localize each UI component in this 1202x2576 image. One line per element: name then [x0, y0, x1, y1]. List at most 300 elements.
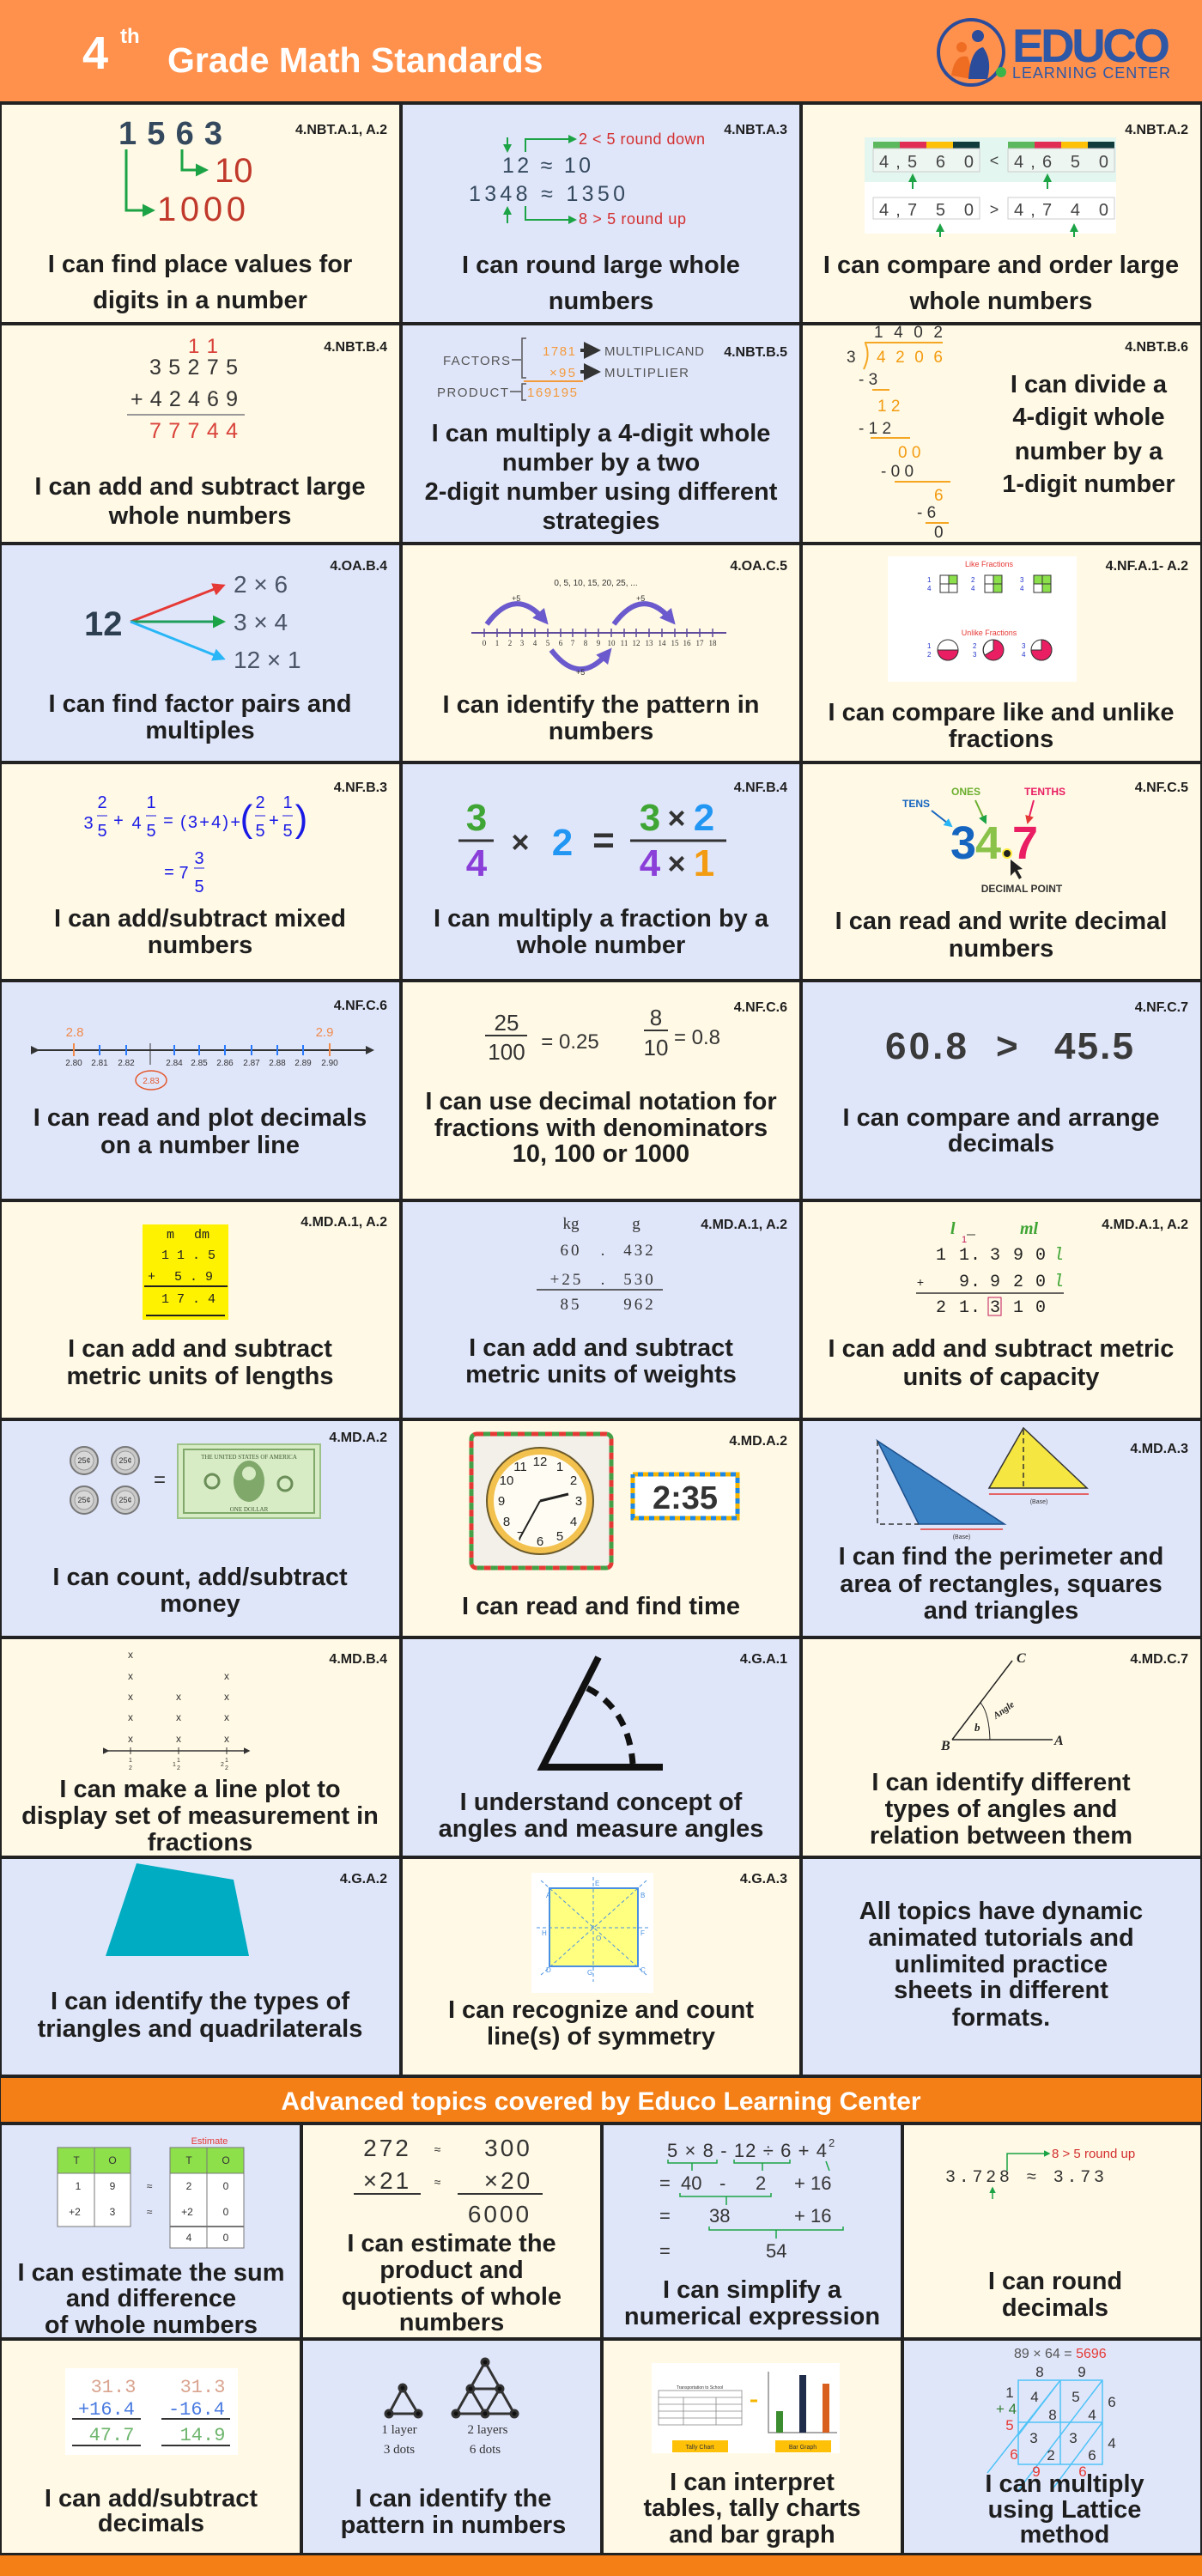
panel: multiply: number by a two: [502, 449, 700, 477]
panel: number pattern: 4: [533, 639, 537, 647]
panel: line plot: [0, 1637, 401, 1857]
panel: metric capacity: 0: [1035, 1298, 1046, 1318]
panel: estimate product: ×20: [484, 2167, 532, 2194]
panel: all topics note: unlimited practice: [895, 1951, 1108, 1978]
panel: decimals number line: 2.81: [91, 1059, 108, 1068]
panel: simplify expression: 54: [766, 2240, 786, 2262]
panel: perimeter area: (Base): [953, 1534, 970, 1540]
panel: dot pattern: 1 layer: [381, 2423, 417, 2437]
panel: simplify expression: + 16: [794, 2205, 831, 2227]
panel: round decimals: 8 > 5 round up: [1052, 2147, 1135, 2161]
panel: fraction times whole: ×: [667, 846, 686, 881]
panel: number pattern: 6: [559, 639, 563, 647]
panel: metric lengths: +: [148, 1270, 155, 1285]
panel: fraction times whole: 2: [694, 797, 714, 839]
panel: lattice multiplication: 9: [1032, 2464, 1041, 2480]
panel: perimeter area: 4.MD.A.3: [1130, 1442, 1188, 1456]
panel: number pattern: 7: [571, 639, 575, 647]
panel: estimate product: ≈: [434, 2175, 443, 2189]
title: [82, 25, 543, 80]
panel: rounding: 8 > 5 round up: [579, 210, 686, 228]
panel: line plot: 2: [221, 1762, 224, 1768]
compare chart: <: [990, 152, 999, 169]
panel: divide: 1 4 0 2: [874, 324, 943, 342]
panel: decimal notation: I can use decimal notation for: [425, 1088, 777, 1115]
panel: factor pairs: 4.OA.B.4: [330, 559, 387, 574]
icon: coins: [70, 1447, 166, 1514]
panel: decimal place: 7: [1012, 817, 1038, 869]
panel: factor pairs: I can find factor pairs and: [49, 690, 351, 718]
panel: fraction times whole: 4.NF.B.4: [734, 781, 787, 795]
panel: estimate sum: O: [222, 2154, 230, 2166]
icon: symmetry square: F: [640, 1929, 645, 1937]
panel: line plot: x: [176, 1691, 181, 1703]
panel: simplify expression: 38: [709, 2205, 730, 2227]
panel: lattice multiplication: 8: [1035, 2364, 1044, 2380]
panel: money: 4.MD.A.2: [329, 1431, 387, 1445]
panel: decimals number line: 2.89: [294, 1059, 312, 1068]
panel: all topics note: sheets in different: [894, 1977, 1108, 2004]
panel: types of angles: C: [1017, 1651, 1026, 1666]
panel: line plot: x: [128, 1733, 133, 1745]
panel: mixed numbers: [0, 762, 401, 981]
panel: perimeter area: and triangles: [924, 1597, 1078, 1625]
panel: compare order: [801, 103, 1202, 324]
panel: perimeter area: (Base): [1030, 1499, 1047, 1505]
panel: decimals number line: 2.83: [143, 1077, 160, 1086]
panel: add subtract decimals: 31.3: [180, 2377, 225, 2398]
panel: divide: 0 0: [898, 444, 920, 462]
compare chart: [865, 137, 1116, 237]
panel: divide: 1 2: [877, 398, 900, 416]
panel: line plot: x: [128, 1691, 133, 1703]
panel: estimate sum: and difference: [66, 2285, 236, 2312]
panel: simplify expression: -: [719, 2172, 725, 2194]
icon: symmetry square: A: [546, 1892, 551, 1899]
panel: line plot: 4.MD.B.4: [329, 1652, 387, 1667]
panel: like unlike fractions: 1: [927, 642, 932, 650]
panel: simplify expression: 2: [756, 2172, 766, 2194]
panel: number pattern: 14: [658, 639, 666, 647]
panel: estimate sum: 1: [76, 2180, 82, 2192]
panel: number pattern: 15: [671, 639, 679, 647]
panel: simplify expression: numerical expression: [624, 2303, 880, 2330]
panel: metric capacity: 1: [959, 1246, 969, 1266]
icon: symmetry square: O: [596, 1935, 601, 1942]
panel: add subtract: +42469: [131, 387, 238, 411]
panel: like unlike fractions: 3: [1022, 642, 1026, 650]
compare chart: 4,7 5 0: [879, 201, 974, 220]
panel: divide: 3: [847, 349, 856, 367]
panel: add subtract decimals: +16.4: [78, 2399, 135, 2421]
panel: round decimals: decimals: [1002, 2294, 1108, 2322]
icon: clock: 8: [503, 1515, 510, 1529]
panel: line plot: x: [128, 1649, 133, 1661]
panel: decimal notation: = 0.8: [674, 1026, 720, 1049]
panel: line plot: x: [176, 1711, 181, 1723]
panel: line plot: 1: [173, 1762, 176, 1768]
panel: estimate product: 6000: [468, 2201, 531, 2227]
panel: place values: 1000: [157, 191, 246, 228]
panel: metric capacity: 1: [962, 1235, 967, 1245]
panel: fraction times whole: 3: [466, 797, 487, 839]
panel: factor pairs: 12 × 1: [234, 647, 301, 673]
panel: triangles quadrilaterals: triangles and quadrilaterals: [38, 2015, 362, 2043]
panel: estimate product: quotients of whole: [342, 2283, 562, 2311]
panel: triangles quadrilaterals: 4.G.A.2: [340, 1872, 387, 1886]
panel: types of angles: Angle: [991, 1699, 1017, 1722]
panel: metric capacity: 2: [1013, 1273, 1023, 1292]
panel: divide: - 6: [917, 504, 936, 522]
panel: estimate sum: 0: [223, 2180, 229, 2192]
panel: number pattern: 13: [646, 639, 653, 647]
panel: perimeter area: I can find the perimeter and: [839, 1543, 1163, 1571]
panel: lattice multiplication: 1: [1005, 2385, 1014, 2401]
panel: estimate product: numbers: [399, 2309, 504, 2336]
panel: mixed numbers: 5: [146, 822, 156, 841]
panel: like unlike fractions: I can compare like and unlike: [829, 699, 1174, 726]
panel: decimals number line: I can read and plot decimals: [33, 1104, 367, 1132]
panel: factor pairs: multiples: [145, 717, 255, 744]
compare chart: 4,7 4 0: [1014, 201, 1108, 220]
panel: line plot: x: [224, 1733, 229, 1745]
panel: types of angles: I can identify different: [871, 1769, 1131, 1796]
panel: number pattern: 16: [683, 639, 691, 647]
panel: fraction times whole: ×: [511, 824, 530, 860]
panel: decimal notation: 4.NF.C.6: [734, 1000, 787, 1015]
panel: add subtract: 4.NBT.B.4: [324, 340, 387, 355]
panel: compare decimals: I can compare and arrange: [842, 1104, 1160, 1132]
panel: decimal place: DECIMAL POINT: [981, 883, 1063, 895]
panel: estimate sum: +2: [69, 2206, 81, 2218]
panel: like unlike fractions: 2: [927, 651, 932, 659]
panel: all topics note: [801, 1857, 1202, 2076]
panel: estimate product: [301, 2123, 602, 2339]
panel: lattice multiplication: 8: [1048, 2407, 1057, 2423]
panel: time: [401, 1419, 801, 1637]
compare chart: >: [990, 201, 999, 218]
panel: metric capacity: 1: [936, 1246, 946, 1266]
panel: lattice multiplication: + 4: [996, 2401, 1017, 2417]
icon: clock: 4: [570, 1515, 577, 1529]
panel: metric lengths: dm: [194, 1228, 209, 1242]
panel: metric capacity: l: [1053, 1246, 1064, 1266]
icon: clock: 2: [570, 1473, 577, 1488]
panel: multiply: 4.NBT.B.5: [724, 345, 787, 360]
panel: metric capacity: 1: [959, 1298, 969, 1318]
panel: metric capacity: I can add and subtract metric: [829, 1335, 1174, 1363]
panel: metric weights: 4.MD.A.1, A.2: [701, 1218, 787, 1232]
panel: divide: 4-digit whole: [1012, 404, 1165, 431]
panel: divide: 4 2 0 6: [877, 349, 943, 367]
panel: line plot: 1: [129, 1758, 132, 1764]
panel: estimate sum: 0: [223, 2206, 229, 2218]
panel: compare decimals: decimals: [948, 1130, 1054, 1157]
panel: number pattern: +5: [576, 668, 585, 677]
panel: number pattern: I can identify the pattern in: [443, 691, 759, 719]
panel: divide: 6: [934, 487, 944, 505]
panel: mixed numbers: (3+4)+: [180, 813, 240, 832]
panel: number pattern: 17: [695, 639, 704, 647]
panel: fraction times whole: 1: [694, 842, 714, 884]
panel: decimals number line: 4.NF.C.6: [334, 999, 387, 1013]
panel: divide: - 3: [859, 371, 877, 389]
icon: clock: 7: [517, 1529, 524, 1544]
panel: line plot: x: [224, 1691, 229, 1703]
panel: metric capacity: 3: [990, 1246, 1000, 1266]
panel: mixed numbers: 5: [97, 822, 107, 841]
panel: number pattern: 11: [621, 639, 628, 647]
panel: estimate sum: 9: [110, 2180, 116, 2192]
panel: lattice multiplication: 3: [1029, 2430, 1038, 2446]
panel: like unlike fractions: 1: [927, 576, 932, 584]
panel: lattice multiplication: 4: [1030, 2389, 1039, 2405]
panel: symmetry: I can recognize and count: [448, 1996, 754, 2024]
panel: round decimals: 3.728 ≈ 3.73: [945, 2168, 1104, 2188]
panel: decimal place: 4: [975, 817, 1001, 869]
icon: clock: 12: [533, 1455, 547, 1469]
panel: add subtract decimals: [0, 2339, 301, 2555]
panel: perimeter area: [801, 1419, 1202, 1637]
icon: clock: 11: [513, 1460, 527, 1474]
panel: estimate product: 300: [484, 2135, 532, 2161]
panel: decimals number line: 2.86: [216, 1059, 234, 1068]
panel: estimate product: 272: [363, 2135, 411, 2161]
panel: lattice multiplication: 4: [1088, 2407, 1096, 2423]
panel: decimal place: 4.NF.C.5: [1135, 781, 1188, 795]
panel: decimals number line: 2.8: [66, 1025, 83, 1040]
panel: decimal notation: 10: [644, 1035, 668, 1060]
panel: decimal notation: 25: [495, 1010, 519, 1036]
panel: mixed numbers: 2: [255, 793, 265, 812]
panel: metric capacity: [801, 1200, 1202, 1419]
panel: like unlike fractions: 3: [973, 651, 977, 659]
panel: number pattern: 18: [709, 639, 717, 647]
panel: metric weights: I can add and subtract: [469, 1334, 733, 1362]
panel: lattice multiplication: method: [1020, 2521, 1109, 2549]
panel: types of angles: types of angles and: [885, 1795, 1117, 1823]
panel: metric lengths: [0, 1200, 401, 1419]
panel: multiply: I can multiply a 4-digit whole: [432, 420, 770, 447]
panel: number pattern: 2: [508, 639, 512, 647]
panel: number pattern: 9: [597, 639, 601, 647]
panel: tables charts: I can interpret: [670, 2469, 835, 2496]
panel: add subtract decimals: 47.7: [89, 2425, 134, 2446]
panel: metric weights: +25: [550, 1271, 583, 1289]
icon: clock: 3: [575, 1494, 582, 1509]
header banner: [0, 0, 1202, 103]
panel: tables charts: tables, tally charts: [643, 2494, 861, 2522]
panel: metric lengths: m: [167, 1228, 174, 1242]
panel: dot pattern: [301, 2339, 602, 2555]
panel: estimate sum: +2: [181, 2206, 193, 2218]
panel: divide: - 1 2: [859, 420, 891, 438]
advanced topics banner: Advanced topics covered by Educo Learning Center: [281, 2087, 921, 2116]
panel: lattice multiplication: 6: [1108, 2394, 1116, 2410]
panel: estimate sum: Estimate: [191, 2136, 228, 2147]
panel: multiply: strategies: [542, 507, 660, 535]
panel: number pattern: 12: [632, 639, 640, 647]
panel: number pattern: [401, 544, 801, 762]
icon: dollar bill: [178, 1444, 320, 1518]
panel: fraction times whole: 4: [466, 842, 488, 884]
panel: line plot: x: [224, 1711, 229, 1723]
panel: lattice multiplication: 6: [1088, 2447, 1096, 2464]
logo: [938, 19, 1170, 85]
icon: dollar bill: THE UNITED STATES OF AMERICA: [201, 1454, 297, 1461]
panel: multiply: MULTIPLIER: [604, 366, 689, 380]
panel: compare order: 4.NBT.A.2: [1125, 123, 1188, 137]
panel: estimate sum: 3: [110, 2206, 116, 2218]
panel: like unlike fractions: Like Fractions: [965, 560, 1014, 568]
panel: add subtract: 77744: [149, 419, 238, 443]
panel: mixed numbers: +: [113, 811, 124, 830]
panel: metric weights: 962: [623, 1296, 656, 1314]
panel: add subtract: 35275: [149, 355, 238, 380]
panel: decimal place: [801, 762, 1202, 981]
panel: compare order: whole numbers: [909, 288, 1092, 315]
panel: line plot: 1: [225, 1758, 228, 1764]
panel: number pattern: 0: [483, 639, 487, 647]
panel: fraction times whole: =: [592, 819, 615, 861]
panel: metric lengths: 4.MD.A.1, A.2: [300, 1215, 387, 1230]
panel: decimals number line: 2.90: [321, 1059, 338, 1068]
panel: number pattern: 8: [584, 639, 588, 647]
panel: mixed numbers: +: [269, 811, 279, 830]
title: th: [120, 25, 140, 48]
panel: money: money: [160, 1590, 240, 1618]
panel: angles concept: 4.G.A.1: [740, 1652, 787, 1667]
panel: lattice multiplication: 89 × 64 = 5696: [1014, 2347, 1107, 2361]
panel: decimals number line: 2.9: [316, 1025, 333, 1040]
icon: symmetry square: D: [546, 1966, 551, 1974]
panel: metric weights: .: [601, 1242, 604, 1260]
panel: estimate sum: T: [73, 2154, 80, 2166]
bar graph: [768, 2372, 837, 2433]
panel: decimals number line: 2.80: [65, 1059, 82, 1068]
panel: lattice multiplication: I can multiply: [985, 2470, 1144, 2498]
logo: LEARNING CENTER: [1012, 64, 1170, 82]
panel: like unlike fractions: 3: [1020, 576, 1024, 584]
panel: lattice multiplication: 6: [1078, 2464, 1087, 2480]
panel: fraction times whole: ×: [667, 800, 686, 835]
panel: place values: I can find place values for: [48, 251, 352, 278]
icon: symmetry square: E: [595, 1880, 599, 1887]
panel: place values: [0, 103, 401, 324]
panel: tables charts: and bar graph: [669, 2521, 835, 2549]
panel: perimeter area: area of rectangles, squares: [840, 1571, 1163, 1598]
panel: decimals number line: 2.82: [118, 1059, 135, 1068]
panel: place values: 10: [215, 152, 252, 190]
panel: decimal place: numbers: [949, 935, 1053, 963]
icon: angle: [543, 1657, 663, 1767]
panel: types of angles: A: [1053, 1734, 1064, 1748]
panel: decimals number line: [0, 981, 401, 1200]
icon: dollar bill: ONE DOLLAR: [230, 1506, 269, 1513]
panel: metric weights: 432: [623, 1242, 656, 1260]
panel: estimate sum: T: [185, 2154, 192, 2166]
panel: lattice multiplication: 3: [1069, 2430, 1078, 2446]
panel: mixed numbers: 1: [146, 793, 156, 812]
panel: mixed numbers: =: [163, 811, 173, 830]
panel: estimate sum: 2: [186, 2180, 192, 2192]
panel: decimal place: TENS: [902, 798, 930, 810]
panel: lattice multiplication: 2: [1047, 2447, 1055, 2464]
panel: rounding: 1348 ≈ 1350: [469, 182, 625, 206]
panel: metric weights: kg: [563, 1215, 580, 1233]
panel: rounding: numbers: [549, 288, 653, 315]
panel: decimal notation: 10, 100 or 1000: [513, 1140, 689, 1168]
panel: line plot: I can make a line plot to: [59, 1776, 341, 1803]
panel: add subtract decimals: 14.9: [180, 2425, 225, 2446]
panel: time: 4.MD.A.2: [729, 1434, 787, 1449]
panel: factor pairs: 12: [84, 605, 122, 643]
panel: fraction times whole: I can multiply a fraction by a: [434, 905, 769, 933]
panel: estimate product: ≈: [434, 2142, 443, 2156]
panel: mixed numbers: 1: [282, 793, 293, 812]
panel: like unlike fractions: 2: [971, 576, 975, 584]
panel: multiply: PRODUCT: [437, 386, 508, 400]
panel: simplify expression: + 16: [794, 2172, 831, 2194]
panel: add subtract decimals: 31.3: [91, 2377, 136, 2398]
panel: number pattern: 4.OA.C.5: [730, 559, 787, 574]
panel: number pattern: +5: [512, 594, 520, 603]
panel: add subtract decimals: -16.4: [168, 2399, 225, 2421]
icon: clock: 6: [537, 1534, 543, 1549]
panel: metric weights: [401, 1200, 801, 1419]
panel: decimal place: I can read and write decimal: [835, 908, 1167, 935]
panel: dot pattern: pattern in numbers: [341, 2512, 566, 2539]
panel: all topics note: formats.: [952, 2004, 1050, 2032]
title: 4: [82, 27, 108, 79]
icon: symmetry square: [531, 1873, 653, 1993]
panel: all topics note: All topics have dynamic: [859, 1898, 1143, 1925]
panel: metric capacity: l: [1053, 1273, 1064, 1292]
panel: place values: 1563: [118, 116, 222, 152]
icon: symmetry square: C: [640, 1966, 646, 1974]
icon: coins: 25¢: [77, 1496, 91, 1504]
panel: metric lengths: 1 1 . 5: [161, 1249, 216, 1263]
panel: estimate sum: [0, 2123, 301, 2339]
icon: clock: 1: [556, 1460, 563, 1474]
panel: tables charts: [602, 2339, 902, 2555]
panel: decimals number line: 2.88: [269, 1059, 286, 1068]
panel: rounding: I can round large whole: [462, 252, 740, 279]
panel: estimate sum: 0: [223, 2232, 229, 2244]
panel: mixed numbers: 5: [194, 878, 204, 896]
panel: rounding: 2 < 5 round down: [579, 131, 705, 148]
panel: decimal place: TENTHS: [1024, 786, 1065, 798]
panel: add subtract decimals: I can add/subtract: [45, 2485, 258, 2512]
panel: lattice multiplication: 4: [1108, 2435, 1116, 2451]
panel: divide: 0: [934, 524, 944, 542]
panel: symmetry: line(s) of symmetry: [487, 2023, 715, 2050]
panel: fraction times whole: [401, 762, 801, 981]
panel: multiply: FACTORS: [443, 354, 510, 368]
icon: clock: 5: [556, 1529, 563, 1544]
panel: angles concept: I understand concept of: [460, 1789, 743, 1816]
panel: time: I can read and find time: [462, 1593, 740, 1620]
panel: line plot: 2: [177, 1765, 180, 1771]
panel: mixed numbers: numbers: [148, 932, 252, 959]
panel: like unlike fractions: 4: [1020, 585, 1024, 592]
panel: decimals number line: 2.84: [166, 1059, 183, 1068]
panel: metric lengths: metric units of lengths: [67, 1363, 333, 1390]
panel: fraction times whole: whole number: [516, 932, 685, 959]
panel: mixed numbers: =: [164, 863, 174, 882]
panel: simplify expression: 2: [829, 2136, 835, 2149]
panel: like unlike fractions: 4.NF.A.1- A.2: [1106, 559, 1188, 574]
